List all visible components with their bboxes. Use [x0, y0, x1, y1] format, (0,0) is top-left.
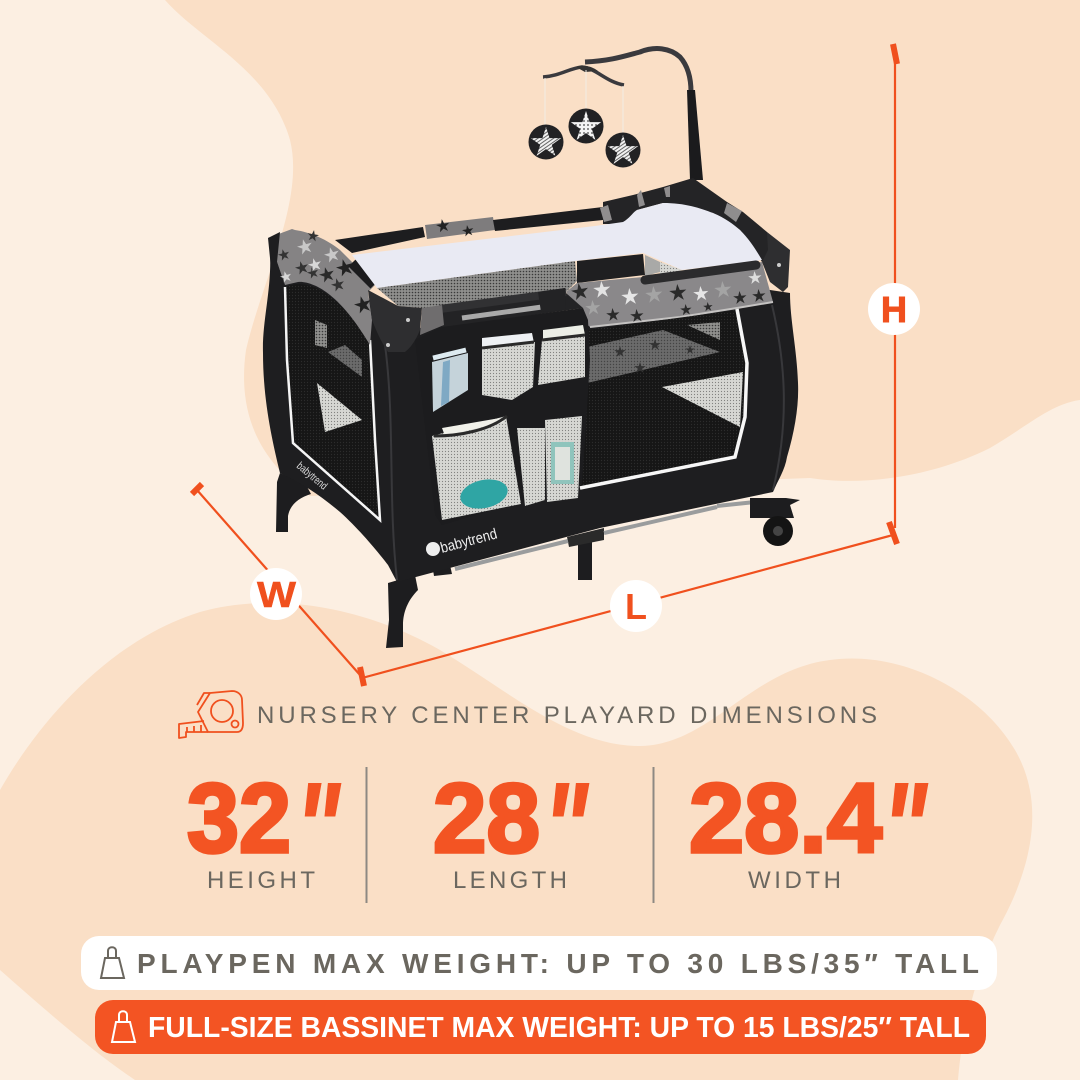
left star fabric: [268, 229, 375, 345]
bassinet front star fabric: [566, 262, 773, 327]
stat: height: [187, 755, 341, 901]
stat: length: LENGTH: [453, 867, 567, 894]
stat: width: WIDTH: [748, 867, 841, 894]
icon: tape measure: [179, 691, 243, 738]
pill: playpen max weight: PLAYPEN MAX WEIGHT: UP TO 30 LBS/35″ TALL: [137, 948, 979, 979]
stat: width: ": [882, 755, 928, 901]
playard body: [263, 250, 798, 582]
babytrend front logo: babytrend: [439, 525, 499, 557]
mattress top: [352, 203, 762, 288]
bassinet handles: [440, 265, 756, 328]
section title: NURSERY CENTER PLAYARD DIMENSIONS: [257, 702, 877, 729]
H marker: [868, 283, 920, 335]
stat: height: ": [295, 755, 341, 901]
W marker: W: [257, 574, 296, 615]
stat: width: 28.4: [689, 763, 882, 873]
icon: weight: [112, 1011, 135, 1042]
L marker: [610, 580, 662, 632]
stat: height: HEIGHT: [207, 867, 315, 894]
mobile arm: [543, 49, 703, 180]
body seams: [385, 305, 784, 580]
left side window: [285, 284, 380, 520]
back rail and clamps: [335, 178, 772, 262]
stat: length: [433, 755, 589, 901]
legs and wheel: [276, 473, 800, 648]
pill: full-size bassinet max weight: FULL-SIZE BASSINET MAX WEIGHT: UP TO 15 LBS/25″ TALL: [148, 1012, 970, 1044]
playard product illustration: [263, 49, 800, 648]
stat: length: ": [543, 755, 589, 901]
stat: height: 32: [187, 763, 291, 873]
icon: weight: [101, 947, 124, 978]
pill: playpen max weight: [81, 936, 997, 990]
L marker: L: [625, 586, 647, 627]
H marker: H: [881, 289, 907, 330]
organizer pockets: [432, 325, 585, 520]
babytrend front logo: [426, 525, 499, 557]
W marker: [250, 568, 302, 620]
hanging star toys: [528, 108, 640, 168]
front window: [580, 309, 747, 488]
dimension lines: [192, 44, 897, 686]
corner blocks: [368, 232, 790, 352]
pill: full-size bassinet max weight: [95, 1000, 986, 1054]
organizer: [415, 308, 590, 525]
stat: length: 28: [433, 763, 540, 873]
babytrend side logo: babytrend: [294, 460, 329, 492]
stat: width: [689, 755, 928, 901]
inner mesh band: [377, 254, 682, 308]
